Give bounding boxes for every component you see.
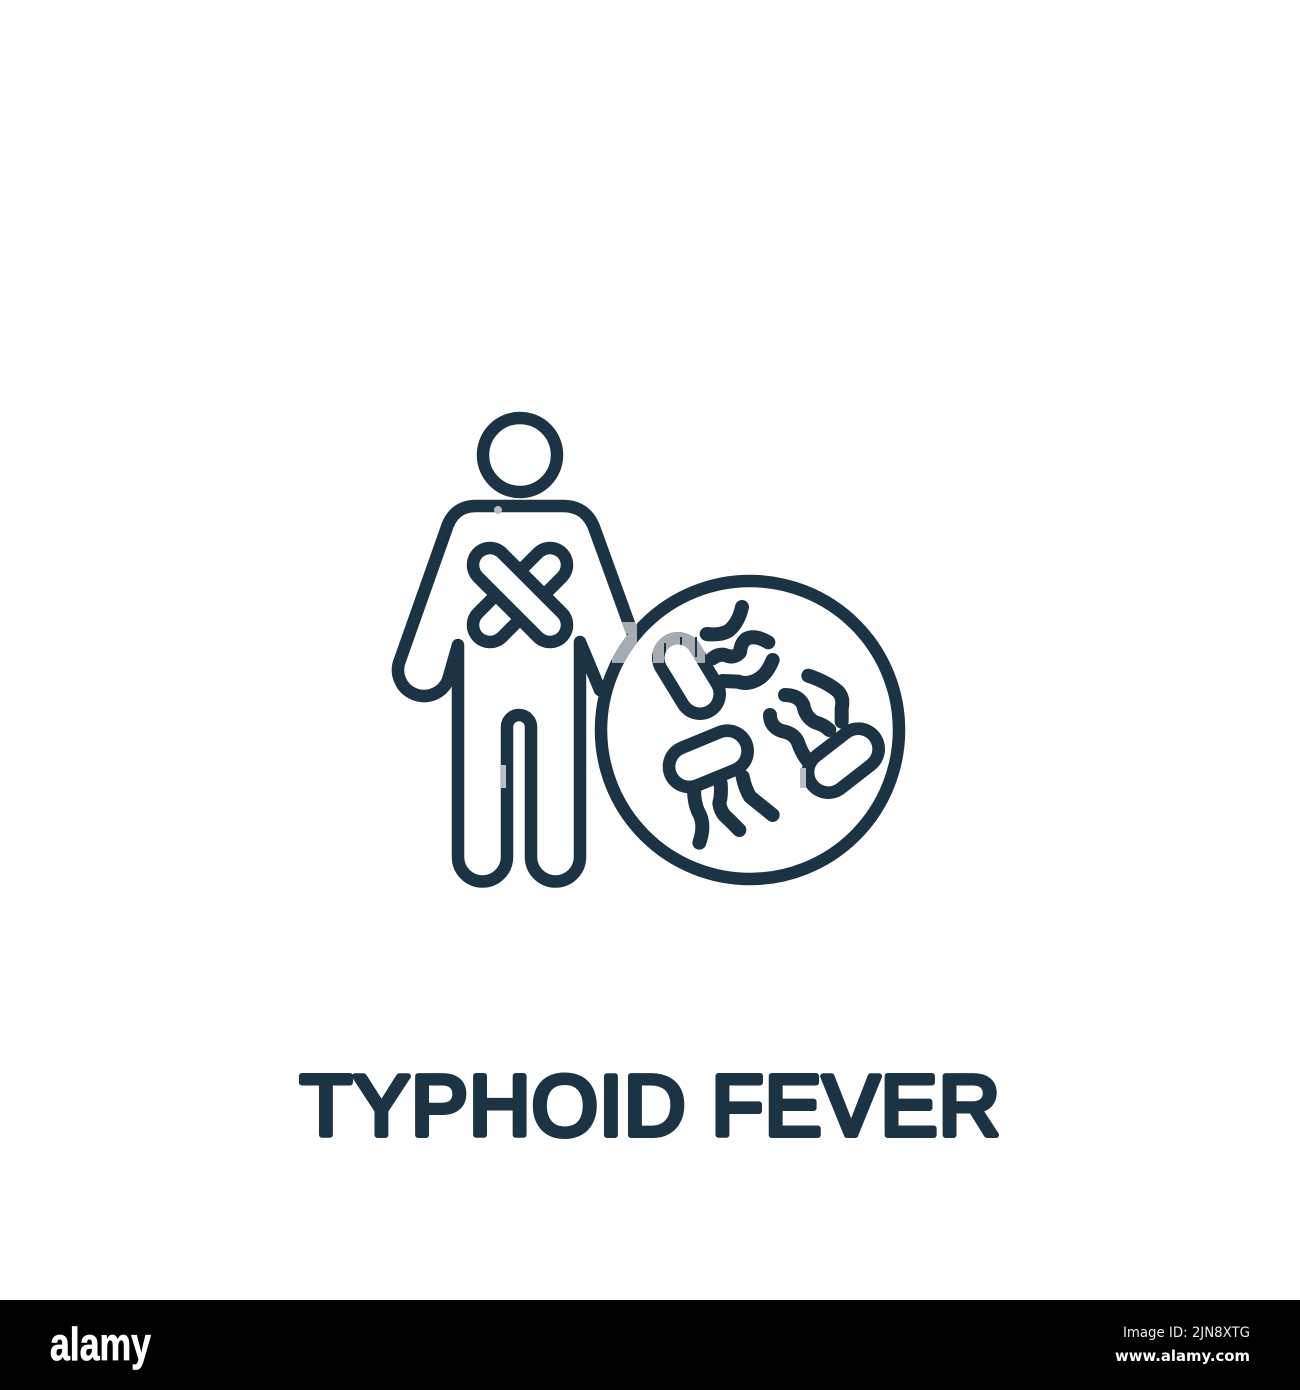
title: TYPHOID FEVER — [300, 1059, 1000, 1154]
bandage front strip — [490, 565, 550, 625]
footer bar — [0, 1300, 1300, 1390]
bandage back strip — [490, 565, 550, 625]
image id: Image ID: 2JN8XTG — [1123, 1325, 1250, 1341]
alamy logo: alamy — [50, 1318, 151, 1370]
website: www.alamy.com — [1115, 1347, 1250, 1365]
bacterium right — [770, 676, 858, 772]
person head — [483, 418, 557, 492]
icon: typhoid fever person with bacteria — [398, 418, 899, 882]
bacterium top — [678, 607, 773, 694]
bacteria group — [678, 607, 858, 843]
person body outline — [398, 506, 632, 882]
magnifier circle — [601, 581, 899, 879]
watermark traces — [494, 506, 806, 788]
bacterium bottom — [689, 751, 773, 843]
icon: person figure — [398, 418, 632, 882]
